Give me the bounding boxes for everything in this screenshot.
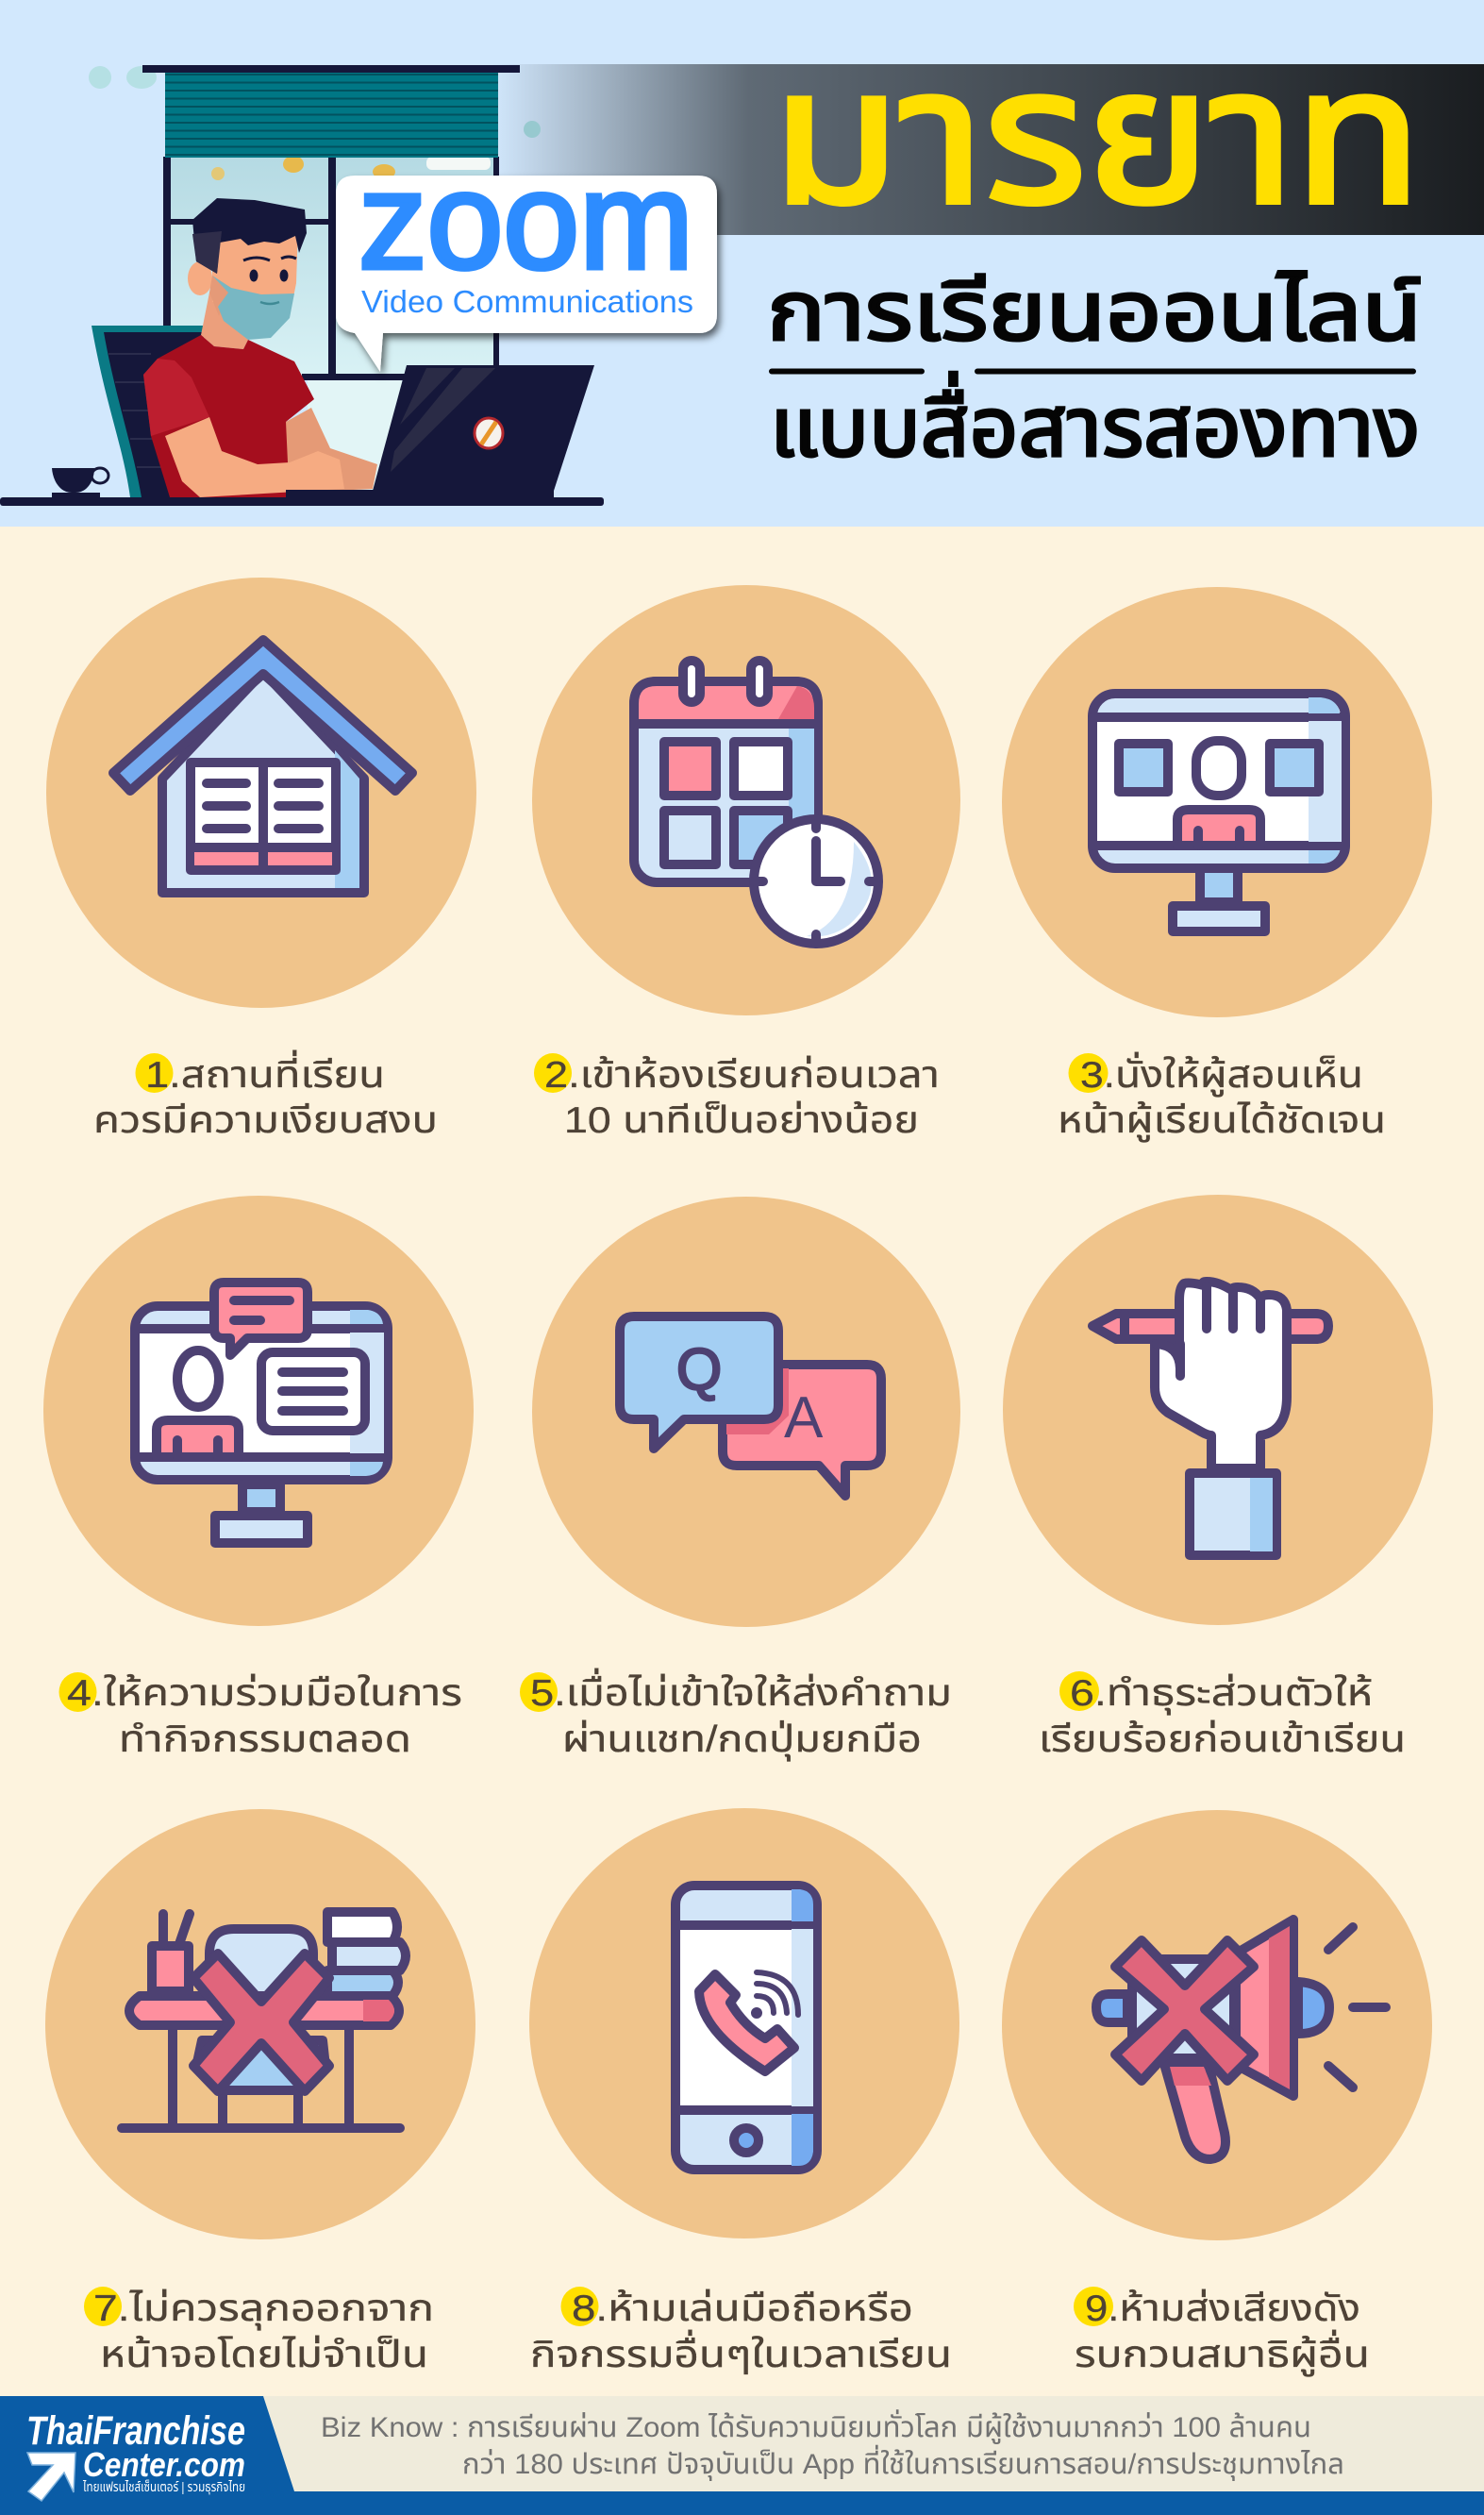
- speech bubble: zoom logo: [336, 143, 717, 372]
- badge 2: [534, 1053, 572, 1093]
- badge 9: [1074, 2287, 1113, 2326]
- caption 9: [1075, 2289, 1370, 2376]
- caption 6: เรียบร้อยก่อนเข้าเรียน: [1039, 1719, 1406, 1760]
- circle: [529, 1808, 959, 2238]
- icon: Q and A speech bubbles: A: [784, 1385, 824, 1450]
- icon: monitor with chat: [135, 1283, 388, 1543]
- circle: [1003, 1195, 1433, 1625]
- caption 6: [1039, 1673, 1406, 1760]
- icon: hand holding pencil: [1092, 1282, 1328, 1555]
- caption 4: [67, 1673, 462, 1760]
- caption 1: 1.สถานที่เรียน: [145, 1049, 385, 1096]
- panel: tip 5: [520, 1197, 960, 1761]
- icon: Q and A speech bubbles: Q: [676, 1337, 722, 1402]
- footer: [0, 2396, 1484, 2515]
- title: main heading: มารยาท: [772, 32, 1422, 243]
- window: [142, 65, 520, 493]
- badge 3: [1068, 1053, 1108, 1093]
- caption 2: 2.เข้าห้องเรียนก่อนเวลา: [544, 1055, 940, 1096]
- logo text line 1: ThaiFranchise: [26, 2408, 245, 2454]
- caption 4: 4.ให้ความร่วมมือในการ: [67, 1673, 462, 1714]
- badge 1: [136, 1053, 174, 1093]
- subtitle line 2: แบบสื่อสารสองทาง: [770, 372, 1420, 474]
- logo: ThaiFranchise Center: [26, 2408, 245, 2501]
- logo tagline: ไทยแฟรนไชส์เซ็นเตอร์ | รวมธุรกิจไทย: [82, 2479, 245, 2495]
- caption 5: [530, 1668, 952, 1761]
- panel: tip 9: [1002, 1810, 1432, 2376]
- logo text line 2: Center.com: [83, 2445, 245, 2484]
- caption 8: [530, 2289, 952, 2375]
- caption 9: 9.ห้ามส่งเสียงดัง: [1085, 2289, 1360, 2329]
- desk: [0, 497, 604, 506]
- circle: [46, 578, 476, 1008]
- caption 7: [93, 2289, 434, 2375]
- badge 4: [58, 1672, 96, 1712]
- caption 8: 8.ห้ามเล่นมือถือหรือ: [572, 2289, 913, 2329]
- panel: tip 1: [46, 578, 476, 1141]
- caption 4: ทำกิจกรรมตลอด: [119, 1719, 411, 1760]
- icon: phone with call: [675, 1886, 817, 2170]
- footer note background: [0, 2396, 1484, 2491]
- icon: megaphone crossed out: [1096, 1920, 1386, 2159]
- circle: [532, 585, 960, 1015]
- panel: tip 8: [529, 1808, 959, 2375]
- icon: house with book: [113, 640, 412, 893]
- icon: logo arrow: [27, 2453, 75, 2501]
- illustration: student at laptop by window: [0, 65, 604, 506]
- cup: [52, 468, 108, 497]
- badge 6: [1059, 1671, 1099, 1711]
- title band: [491, 64, 1484, 235]
- icon: monitor with video call: [1092, 694, 1345, 931]
- panel: tip 6: [1003, 1195, 1433, 1760]
- icon: desk and chair crossed out: [122, 1912, 406, 2128]
- badge 8: [560, 2287, 598, 2326]
- laptop: [286, 365, 594, 498]
- circle: [43, 1196, 474, 1626]
- caption 6: 6.ทำธุระส่วนตัวให้: [1070, 1673, 1373, 1715]
- caption 5: 5.เมื่อไม่เข้าใจให้ส่งคำถาม: [530, 1668, 952, 1714]
- caption 7: หน้าจอโดยไม่จำเป็น: [100, 2335, 428, 2375]
- footer note: Biz Know : การเรียนผ่าน Zoom ได้รับความนิยมทั่วโลก มีผู้ใช้งานมากกว่า 100 ล้านคน: [321, 2409, 1311, 2444]
- caption 5: ผ่านแชท/กดปุ่มยกมือ: [562, 1719, 922, 1761]
- icon: Q and A speech bubbles: [620, 1316, 881, 1496]
- caption 1: [93, 1049, 438, 1141]
- circle: [1002, 1810, 1432, 2240]
- subtitle line 1: การเรียนออนไลน์: [767, 264, 1422, 358]
- footer blue base and logo panel: [0, 2396, 1484, 2515]
- caption 1: ควรมีความเงียบสงบ: [93, 1100, 438, 1141]
- zoom wordmark: zoom: [358, 143, 693, 297]
- header panel: [0, 0, 1484, 527]
- caption 2: 10 นาทีเป็นอย่างน้อย: [564, 1100, 919, 1141]
- badge 7: [84, 2287, 122, 2326]
- decorative dots: [89, 66, 541, 138]
- tagline: Video Communications: [361, 284, 693, 319]
- circle: [532, 1197, 960, 1627]
- header background: [0, 0, 1484, 527]
- icon: calendar and clock: [634, 661, 878, 944]
- caption 3: [1058, 1051, 1386, 1142]
- person: [143, 198, 377, 497]
- circle: [45, 1809, 475, 2239]
- circle: [1002, 587, 1432, 1017]
- panel: tip 7: [45, 1809, 475, 2375]
- footer note: [321, 2409, 1344, 2481]
- subtitle divider: [772, 368, 1413, 374]
- badge 5: [520, 1672, 558, 1712]
- caption 3: 3.นั่งให้ผู้สอนเห็น: [1080, 1051, 1363, 1097]
- panel: tip 2: [532, 585, 960, 1141]
- panel: tip 4: [43, 1196, 474, 1760]
- bubble shape: [336, 176, 717, 372]
- panel: tip 3: [1002, 587, 1432, 1142]
- caption 3: หน้าผู้เรียนได้ชัดเจน: [1058, 1100, 1386, 1142]
- chair: [92, 326, 204, 497]
- caption 2: [544, 1055, 940, 1141]
- caption 9: รบกวนสมาธิผู้อื่น: [1075, 2329, 1370, 2376]
- caption 7: 7.ไม่ควรลุกออกจาก: [93, 2289, 434, 2330]
- footer note: กว่า 180 ประเทศ ปัจจุบันเป็น App ที่ใช้ในการเรียนการสอน/การประชุมทางไกล: [462, 2444, 1344, 2481]
- caption 8: กิจกรรมอื่นๆในเวลาเรียน: [530, 2329, 952, 2375]
